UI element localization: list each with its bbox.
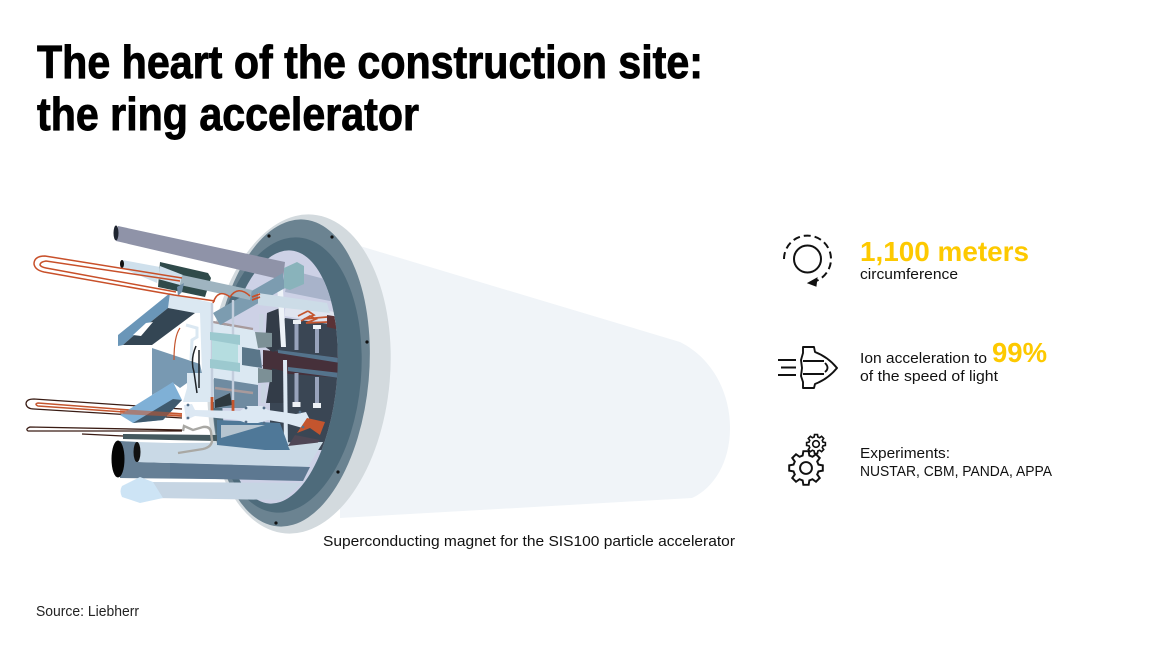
- stat: circumference: circumference: [860, 267, 958, 283]
- dark conduit: [123, 434, 217, 441]
- interior bars: [278, 350, 340, 378]
- title: [37, 36, 703, 140]
- ring tunnel cone: [340, 240, 730, 518]
- blue foot block: [120, 382, 182, 423]
- stat: ion acceleration: [860, 337, 1047, 385]
- lower copper coil: [26, 399, 182, 436]
- lavender wedge and pale block: [205, 298, 290, 408]
- pale frame: [168, 293, 214, 402]
- steel bracket and shadow: [118, 293, 195, 346]
- steel frame block: [152, 348, 202, 395]
- frame window details: [174, 325, 199, 393]
- title: the ring accelerator: [37, 88, 419, 140]
- lower pipes: [112, 440, 323, 503]
- source: Source: Liebherr: [36, 604, 139, 620]
- upper copper coil: [34, 256, 260, 303]
- icon: ion rocket: [778, 347, 837, 388]
- cold pipe with dark jacket: [120, 260, 252, 300]
- caption: Superconducting magnet for the SIS100 particle accelerator: [323, 534, 735, 550]
- icon: gears: [789, 435, 825, 485]
- stat: ion acceleration: 99%: [992, 337, 1047, 368]
- stat: ion acceleration: Ion acceleration to: [860, 351, 987, 367]
- ring interior: [222, 250, 338, 504]
- clamps and blocks: [210, 300, 272, 413]
- stat: experiments: [860, 446, 1052, 480]
- magnet illustration: [26, 207, 730, 541]
- stat: experiments: Experiments:: [860, 446, 950, 462]
- grey wire: [178, 426, 212, 453]
- stat: experiments: NUSTAR, CBM, PANDA, APPA: [860, 464, 1052, 480]
- stat: circumference: 1,100 meters: [860, 236, 1029, 267]
- grey upper pipe: [114, 226, 285, 280]
- stat: circumference: [860, 236, 1029, 283]
- title: The heart of the construction site:: [37, 36, 703, 88]
- dark tower and white post: [262, 270, 288, 450]
- teal box and steel strut: [213, 262, 330, 325]
- outer flange: [194, 207, 404, 541]
- bolts: [294, 322, 319, 404]
- icon: circumference ring: [784, 236, 831, 286]
- lower support plate: [184, 404, 325, 450]
- stat: ion acceleration: of the speed of light: [860, 369, 998, 385]
